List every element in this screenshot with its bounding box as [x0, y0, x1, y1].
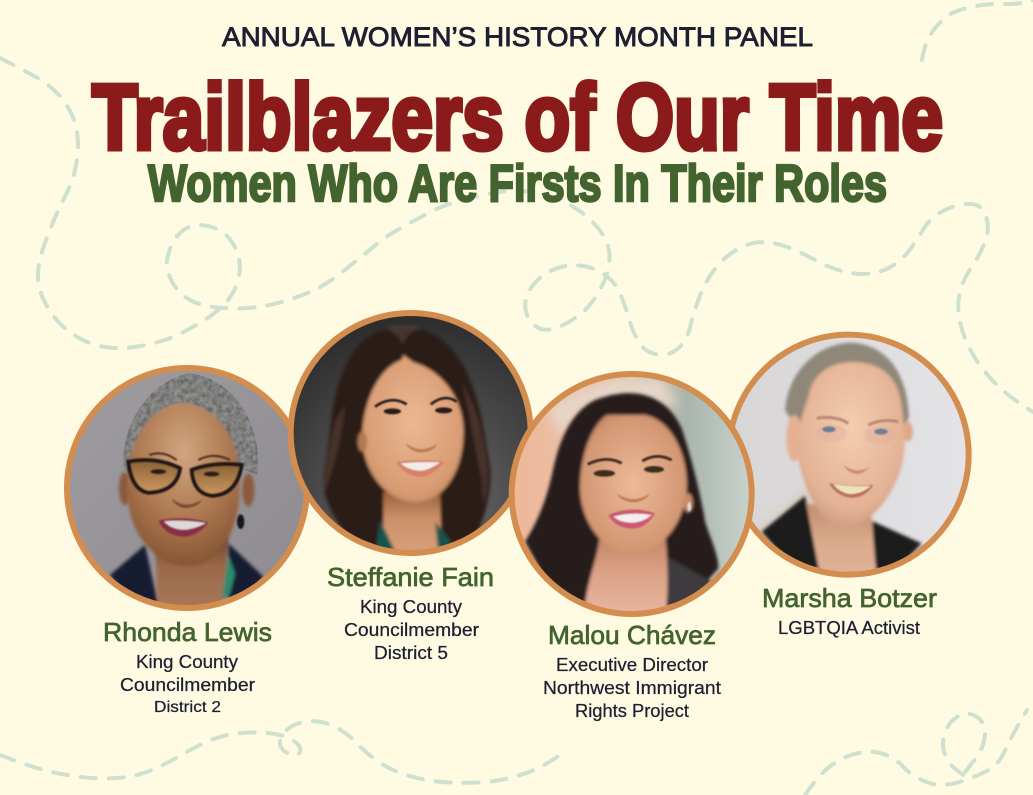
- ring: [291, 313, 531, 553]
- ring: [67, 368, 307, 608]
- speaker: Rhonda Lewis: District 2: [154, 699, 221, 716]
- speaker: Marsha Botzer: LGBTQIA Activist: [778, 618, 920, 638]
- speaker: Malou Chávez: Rights Project: [575, 701, 689, 721]
- speaker: Marsha Botzer: Marsha Botzer: [762, 583, 937, 613]
- portrait: Rhonda Lewis: [60, 360, 313, 613]
- speaker: Malou Chávez: Executive Director: [556, 655, 708, 675]
- heading: event name: ANNUAL WOMEN’S HISTORY MONTH PANEL: [222, 22, 813, 52]
- speaker: Rhonda Lewis: Councilmember: [120, 675, 255, 695]
- speaker: Steffanie Fain: [327, 562, 494, 663]
- speaker: Marsha Botzer: [762, 583, 937, 638]
- ring: [729, 335, 969, 575]
- speaker: Steffanie Fain: Councilmember: [344, 620, 479, 640]
- speaker: Steffanie Fain: King County: [360, 597, 462, 617]
- portrait: Malou Chávez: [505, 365, 758, 618]
- speaker: Malou Chávez: Malou Chávez: [548, 620, 716, 650]
- speaker: Malou Chávez: Northwest Immigrant: [543, 678, 721, 698]
- speaker: Steffanie Fain: District 5: [374, 643, 448, 663]
- speaker: Rhonda Lewis: Rhonda Lewis: [103, 617, 272, 647]
- portrait: Marsha Botzer: [725, 330, 978, 583]
- ring: [512, 374, 752, 614]
- speaker: Rhonda Lewis: [103, 617, 272, 716]
- speaker: Malou Chávez: [543, 620, 721, 721]
- portrait: Steffanie Fain: [285, 305, 538, 558]
- speaker: Rhonda Lewis: King County: [136, 652, 238, 672]
- speaker: Steffanie Fain: Steffanie Fain: [327, 562, 494, 592]
